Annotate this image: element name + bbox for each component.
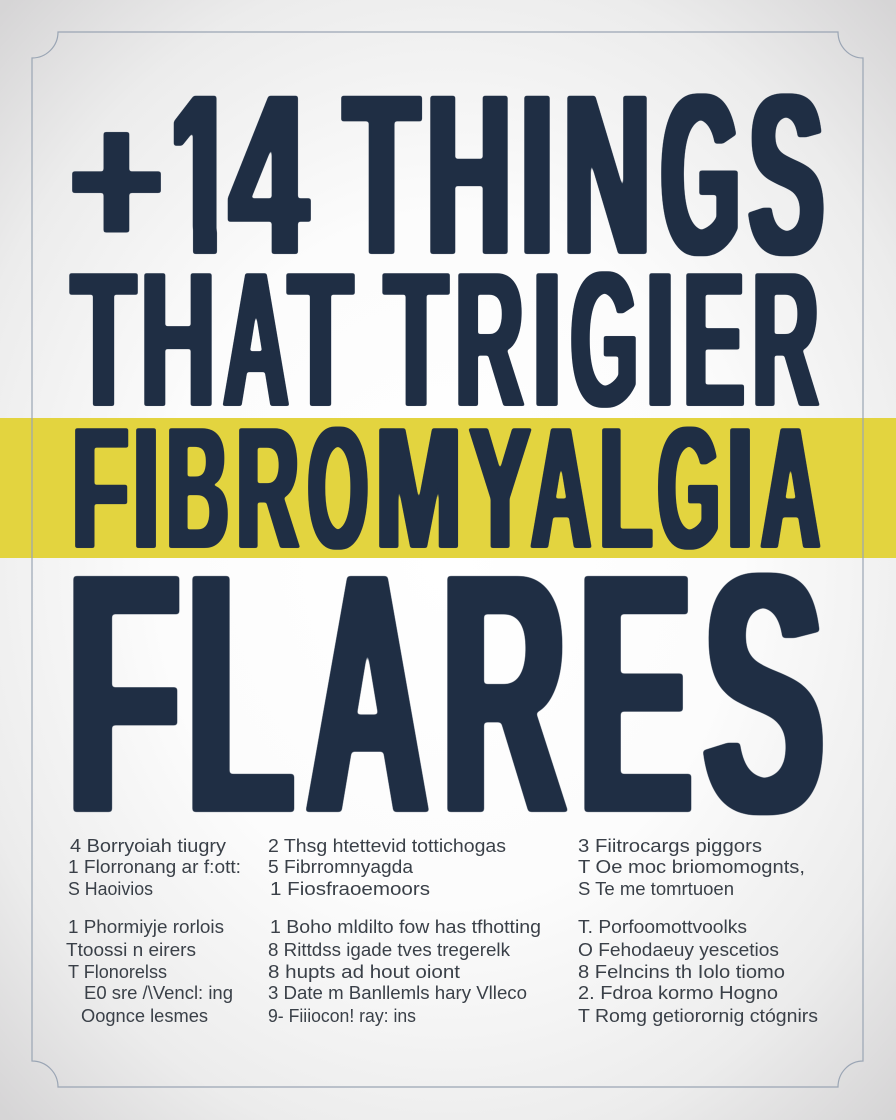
title line 4: L — [187, 502, 294, 885]
text column 2: 8 hupts ad hout oiont — [268, 962, 460, 982]
title line 2: T — [288, 233, 353, 448]
title line 3: M — [375, 391, 462, 586]
title line 3: L — [599, 392, 652, 586]
title line 2: E — [683, 232, 745, 448]
text column 2: 3 Date m Banllemls hary Vlleco — [268, 983, 527, 1003]
title line 1: I — [520, 46, 554, 303]
title line 3: I — [133, 391, 159, 585]
title — [69, 93, 824, 816]
text column 2: 9- Fiiiocon! ray: ins — [268, 1006, 416, 1026]
title line 4: R — [442, 503, 566, 885]
title line 2 — [71, 232, 819, 448]
text column 1: 1 Florronang ar f:ott: — [68, 857, 241, 877]
text column 1 — [66, 836, 241, 1026]
title line 2: I — [532, 233, 562, 448]
text column 2 — [268, 836, 541, 1026]
text column 2: 1 Fiosfraoemoors — [270, 879, 430, 899]
text column 1: E0 sre /\Vencl: ing — [84, 983, 233, 1003]
title line 2: A — [223, 232, 289, 447]
text column 3: S Te me tomrtuoen — [578, 879, 734, 899]
title line 3: A — [531, 391, 591, 585]
text column 3: T. Porfoomottvoolks — [578, 917, 747, 937]
title line 2: I — [645, 233, 675, 448]
title line 3: F — [72, 391, 129, 585]
text column 2: 8 Rittdss igade tves tregerelk — [268, 940, 511, 960]
title line 4: A — [307, 503, 428, 886]
title line 4 — [67, 502, 824, 886]
title line 1: S — [749, 47, 824, 304]
title line 3: O — [308, 390, 368, 585]
text column 3: 8 Felncins th Iolo tiomo — [578, 962, 785, 982]
text column 1: Ttoossi n eirers — [66, 940, 196, 960]
title line 3: A — [761, 390, 820, 585]
title line 1: 1 — [170, 45, 234, 303]
title line 1: N — [563, 46, 651, 303]
text column 2: 2 Thsg htettevid tottichogas — [268, 836, 506, 856]
title line 2: T — [384, 232, 448, 447]
title line 1: T — [344, 47, 419, 304]
text column 1: T Flonorelss — [68, 962, 167, 982]
title line 2: H — [140, 232, 216, 447]
title line 3: B — [166, 392, 229, 586]
yellow highlight band — [0, 418, 896, 558]
text column 2: 5 Fibrromnyagda — [268, 857, 414, 877]
title line 2: R — [455, 232, 524, 448]
title line 3: G — [658, 390, 720, 585]
text column 3: 2. Fdroa kormo Hogno — [578, 983, 778, 1003]
title line 4: E — [579, 502, 692, 886]
text column 3: T Oe moc briomomognts, — [578, 857, 805, 877]
title line 2: G — [571, 232, 638, 447]
title line 2: R — [752, 233, 819, 448]
title line 1: 4 — [230, 48, 308, 304]
text column 3: O Fehodaeuy yescetios — [578, 940, 779, 960]
title line 1: + — [69, 70, 163, 291]
text column 3: T Romg getiorornig ctógnirs — [578, 1006, 818, 1026]
title line 3 — [72, 390, 820, 586]
text column 2: 1 Boho mldilto fow has tfhotting — [270, 917, 541, 937]
title line 4: F — [67, 502, 180, 885]
title line 4: S — [704, 503, 824, 886]
text column 3: 3 Fiitrocargs piggors — [578, 836, 762, 856]
title line 1 — [72, 93, 824, 256]
text column 1: 4 Borryoiah tiugry — [70, 836, 226, 856]
title line 3: R — [236, 392, 299, 586]
title line 1: G — [661, 46, 740, 303]
text column 1: S Haoivios — [68, 879, 153, 899]
text column 3 — [578, 836, 818, 1026]
text column 1: 1 Phormiyje rorlois — [68, 917, 224, 937]
title line 3: Y — [470, 391, 530, 586]
title line 1: H — [426, 46, 512, 303]
text column 1: Oognce lesmes — [81, 1006, 208, 1026]
title line 2: T — [71, 233, 136, 448]
title line 3: I — [727, 391, 753, 585]
